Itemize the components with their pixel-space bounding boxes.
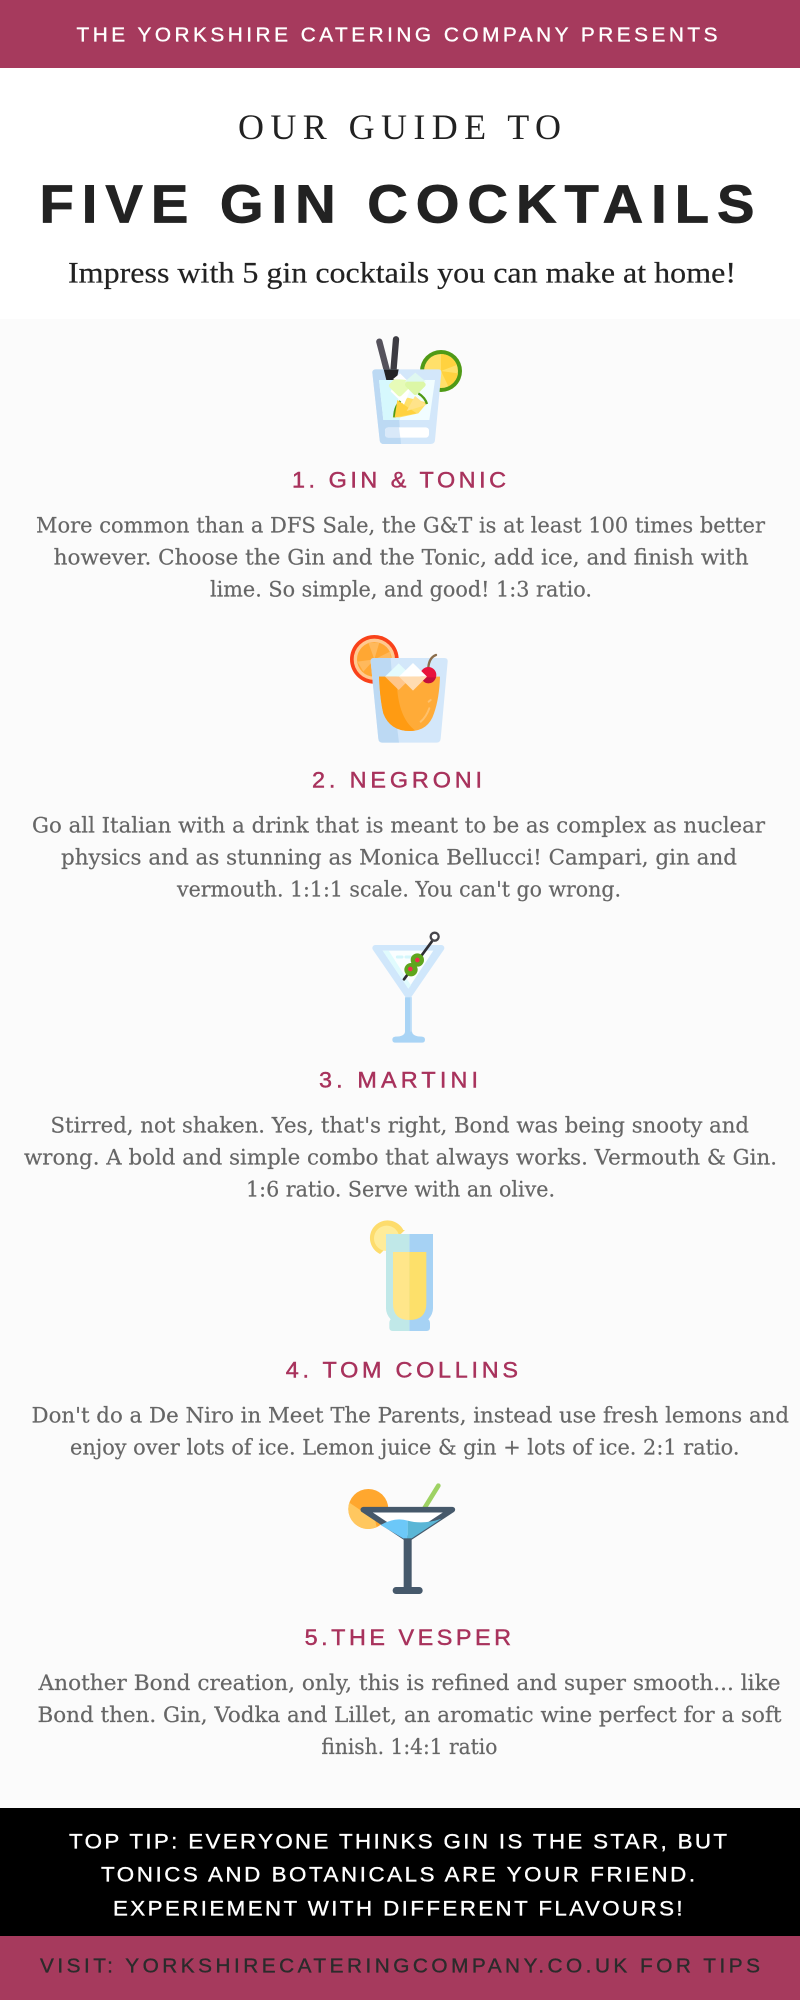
- heading: the vesper: 5.THE VESPER: [305, 1624, 511, 1650]
- icon: negroni glass: [350, 635, 448, 743]
- footer banner: [0, 1936, 800, 2000]
- callout: top tip: TOP TIP: EVERYONE THINKS GIN IS THE STAR, BUT: [69, 1829, 727, 1853]
- top banner: THE YORKSHIRE CATERING COMPANY PRESENTS: [76, 25, 717, 47]
- description: gin and tonic: More common than a DFS Sale, the G&T is at least 100 times better: [36, 514, 766, 539]
- description: negroni: vermouth. 1:1:1 scale. You can't go wrong.: [176, 878, 621, 903]
- description: martini: wrong. A bold and simple combo that always works. Vermouth & Gin.: [24, 1146, 777, 1171]
- description: negroni: physics and as stunning as Monica Bellucci! Campari, gin and: [61, 846, 737, 871]
- icon: gin and tonic glass: [372, 339, 462, 444]
- description: the vesper: Another Bond creation, only, this is refined and super smooth... like: [37, 1671, 780, 1696]
- description: the vesper: [37, 1671, 782, 1760]
- description: gin and tonic: [36, 514, 766, 603]
- panel: tom collins: [32, 1220, 789, 1461]
- heading: negroni: 2. NEGRONI: [312, 767, 482, 793]
- subtitle: Impress with 5 gin cocktails you can make at home!: [68, 258, 736, 290]
- heading: gin and tonic: 1. GIN & TONIC: [292, 467, 506, 493]
- panel: gin and tonic: [36, 339, 766, 603]
- icon: martini glass: [375, 933, 441, 1043]
- title block: [0, 68, 800, 319]
- description: tom collins: enjoy over lots of ice. Lemon juice & gin + lots of ice. 2:1 ratio.: [70, 1436, 740, 1461]
- description: martini: 1:6 ratio. Serve with an olive.: [246, 1178, 555, 1203]
- heading: five gin cocktails: FIVE GIN COCKTAILS: [40, 174, 754, 234]
- heading: martini: 3. MARTINI: [319, 1067, 478, 1093]
- description: gin and tonic: however. Choose the Gin and the Tonic, add ice, and finish with: [54, 546, 749, 571]
- heading: tom collins: 4. TOM COLLINS: [286, 1357, 518, 1383]
- callout: top tip: [0, 1808, 800, 1936]
- description: martini: [24, 1114, 777, 1203]
- panel: negroni: [32, 635, 766, 903]
- callout: top tip: EXPERIEMENT WITH DIFFERENT FLAVOURS!: [113, 1896, 683, 1920]
- panel: martini: [24, 933, 777, 1203]
- icon: collins glass: [370, 1220, 433, 1331]
- description: the vesper: finish. 1:4:1 ratio: [321, 1735, 497, 1760]
- description: gin and tonic: lime. So simple, and good! 1:3 ratio.: [210, 578, 592, 603]
- description: the vesper: Bond then. Gin, Vodka and Lillet, an aromatic wine perfect for a soft: [38, 1703, 782, 1728]
- description: negroni: [32, 814, 766, 903]
- heading: our guide to: OUR GUIDE TO: [238, 107, 561, 147]
- description: tom collins: Don't do a De Niro in Meet The Parents, instead use fresh lemons and: [32, 1404, 789, 1429]
- callout: top tip: TONICS AND BOTANICALS ARE YOUR FRIEND.: [101, 1862, 695, 1887]
- description: martini: Stirred, not shaken. Yes, that's right, Bond was being snooty and: [50, 1114, 749, 1139]
- description: tom collins: [32, 1404, 789, 1461]
- description: negroni: Go all Italian with a drink that is meant to be as complex as nuclear: [32, 814, 766, 839]
- icon: vesper glass: [348, 1486, 452, 1594]
- footer banner: VISIT: YORKSHIRECATERINGCOMPANY.CO.UK FOR TIPS: [40, 1956, 760, 1978]
- panel: the vesper: [37, 1486, 782, 1760]
- top banner: [0, 0, 800, 68]
